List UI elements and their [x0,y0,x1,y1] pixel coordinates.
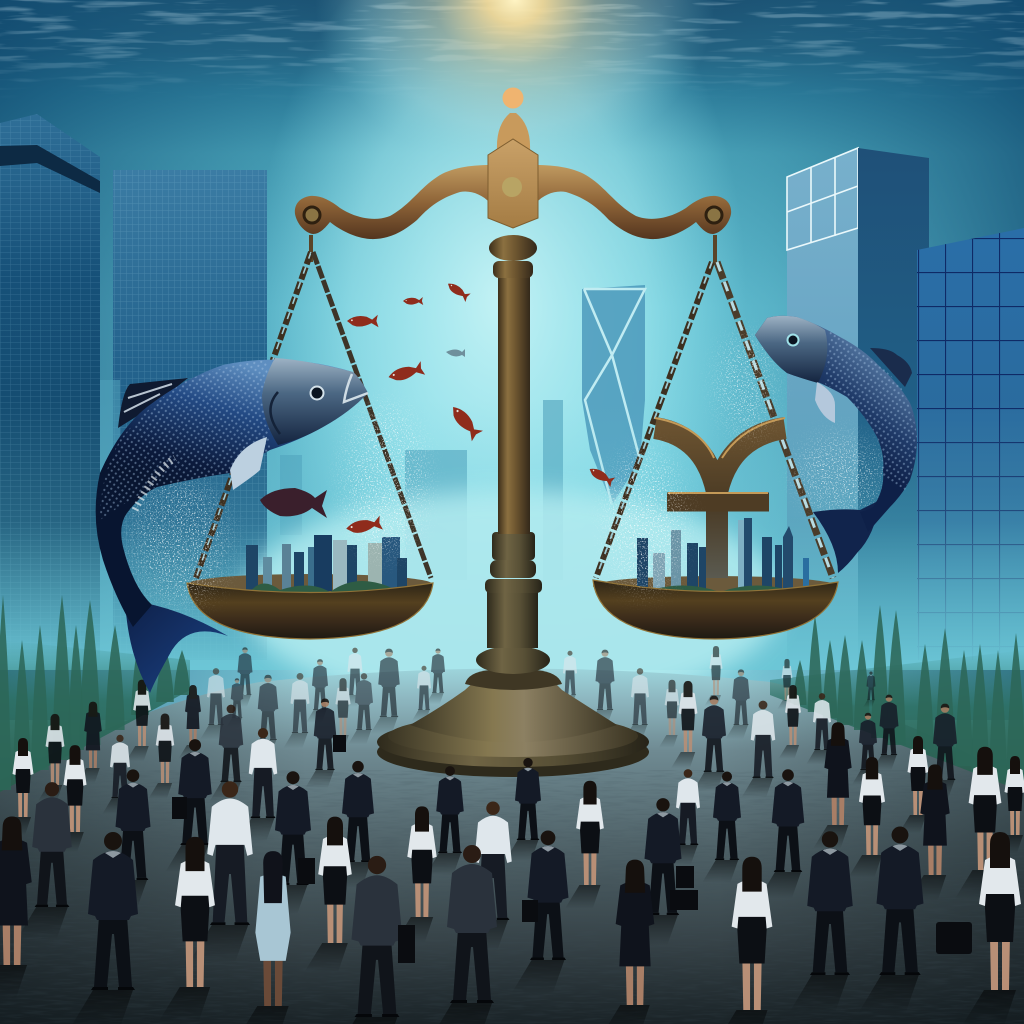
water spray [121,322,884,616]
right fish head [755,316,827,383]
distant faded towers [100,380,563,580]
right fish body [755,316,917,532]
building: twisted centre tower [582,285,645,505]
right fish eye [788,334,798,346]
left fish scales [100,360,270,520]
left fish spots [135,458,175,510]
briefcases [172,735,972,963]
left fish dorsal fin [118,378,188,428]
pivot [502,177,522,197]
right arm end [706,207,722,223]
left fish pectoral fin [230,437,267,490]
background buildings [0,114,1024,670]
left chains [196,235,431,578]
building: far right grid tower [917,228,1024,660]
left pan [187,583,433,639]
left pan back [188,574,432,594]
right pan city [637,518,809,594]
scale base [377,532,649,777]
right chains [596,235,833,578]
left fish tail [125,600,228,693]
left fish gill [270,392,280,434]
left arm [295,165,490,239]
floor [0,668,1024,1024]
finial ball [502,88,524,108]
water surface with sun [0,0,1024,136]
left fish eye [310,386,324,400]
left fish mouth [344,374,368,402]
right pan symbol [655,418,785,578]
building: second left tower [113,170,267,660]
seaweed left [0,595,190,792]
left fish body [96,360,368,627]
right fish tail [813,500,880,573]
right fish scales [825,330,917,490]
haze over tower bases [0,400,1024,670]
large left fish [96,358,368,693]
right pan [593,580,838,639]
left arm end [304,207,320,223]
seaweed right [770,605,1024,792]
right arm [536,165,731,239]
centre plate [488,139,538,228]
right pan back [593,576,837,596]
crowd: middle people [38,680,957,814]
crowd: front people [0,735,1021,1024]
crowd: distant people [200,646,875,756]
right fish pectoral fin [815,382,835,423]
building: right glass tower [787,148,929,660]
finial [497,113,530,150]
crowd: near people [4,722,1024,914]
building: far left tower [0,114,100,660]
left fish head [262,358,368,445]
large right fish [755,316,917,573]
right fish dorsal fin [870,348,912,387]
scale [295,88,731,777]
left pan city [246,535,407,592]
pale centre glow over haze [242,490,782,710]
scale post [498,272,530,534]
scale collar [489,235,537,278]
small swimming fish [260,280,616,536]
